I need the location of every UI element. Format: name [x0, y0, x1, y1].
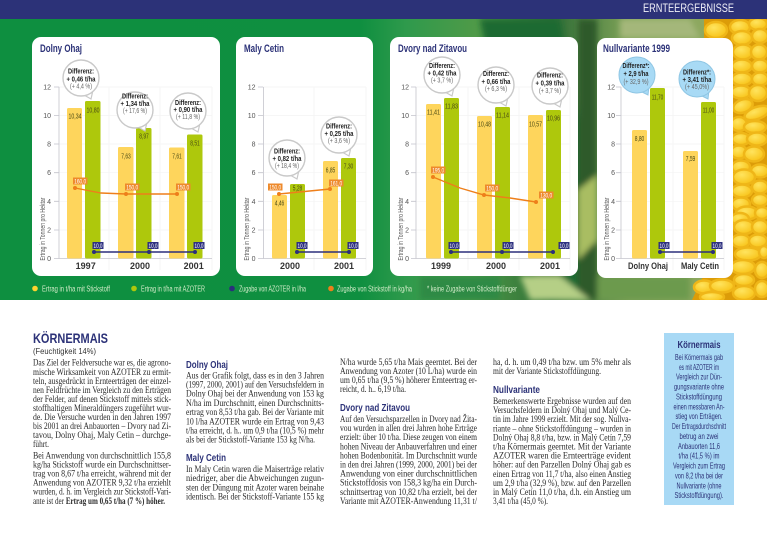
- callout: Körnermais summary: Vergleich zur Dün-: [676, 372, 722, 382]
- panel: Maly Cetin: 10: [248, 113, 256, 120]
- panel: Nullvariante 1999: 8,80: [635, 134, 644, 143]
- text column 3: in den drei Jahren (1999, 2000, 2001) bei der: [340, 460, 477, 470]
- text column 1: bis 2001 an drei Anbauorten – Dvory nad Zi-: [33, 421, 171, 431]
- text column 2: In Maly Cetin waren die Maiserträge relativ: [186, 464, 324, 474]
- panel: Dvory nad Zitavou: + 0,66 t/ha: [482, 77, 511, 86]
- panel: Nullvariante 1999: 11,70: [652, 92, 663, 102]
- panel: Dvory nad Zitavou: 2000: [486, 261, 506, 271]
- text column 3: Auf den Versuchsparzellen in Dvory nad Žita-: [340, 414, 477, 424]
- panel: Nullvariante 1999: [597, 38, 733, 278]
- text column 3: Variante mit AZOTER-Anwendung 11,31 t/: [340, 496, 477, 506]
- text column 4: um 2,9 t/ha (32,9 %), bzw. auf den Parzellen: [493, 478, 631, 488]
- legend: Zugabe von AZOTER in l/ha: [239, 284, 306, 294]
- panel: Maly Cetin: Differenz:: [274, 146, 300, 156]
- panel: Dvory nad Zitavou: Dvory nad Zitavou: [398, 43, 467, 55]
- callout: Körnermais summary: gungsvariante ohne: [674, 382, 724, 392]
- field photo background band: [0, 19, 767, 300]
- panel: Dolny Ohaj: 150,0: [177, 184, 189, 191]
- legend: * keine Zugabe von Stickstoffdünger: [427, 284, 517, 294]
- callout: Körnermais summary: Stickstoffdüngung).: [674, 490, 724, 500]
- text column 3: N/ha wurde 5,65 t/ha Mais geerntet. Bei der: [340, 357, 477, 367]
- callout: Körnermais summary: Körnermais: [678, 340, 721, 351]
- panel: Maly Cetin: 12: [248, 84, 256, 91]
- panel: Dolny Ohaj: 10,34: [68, 112, 82, 120]
- text column 2: als bei der Stickstoff-Variante 153 kg N/ha.: [186, 435, 315, 445]
- panel: Dvory nad Zitavou: (+ 3,7 %): [431, 78, 453, 84]
- panel: Dvory nad Zitavou: 11,14: [496, 110, 509, 120]
- panel: Dvory nad Zitavou: 11,41: [427, 108, 440, 116]
- panel: Dvory nad Zitavou: 1999: [431, 261, 451, 271]
- heading: Körnermais: KÖRNERMAIS: [33, 330, 108, 346]
- callout: Körnermais summary: Anbauorten 11,6: [678, 441, 720, 451]
- panel: Dolny Ohaj: 10,0: [148, 243, 158, 250]
- text column 4: höher: auf den Parzellen Dolný Ohaj gab es: [493, 460, 631, 470]
- text column 1: kg/ha Stickstoff wurde ein Durchschnittser-: [33, 459, 171, 469]
- panel: Dolny Ohaj: Differenz:: [122, 92, 148, 100]
- panel: Maly Cetin: 2000: [280, 261, 300, 271]
- panel: Dvory nad Zitavou: [390, 37, 578, 276]
- text column 2: identisch. Bei der Stickstoff-Variante 155 kg: [186, 492, 324, 502]
- panel: Dolny Ohaj: + 0,90 t/ha: [174, 105, 203, 114]
- text column 3: schnittsertrag von 10,82 t/ha erzielt, bei der: [340, 487, 477, 497]
- text column 1: ante ist der Ertrag um 0,65 t/ha (7 %) höher.: [33, 496, 165, 506]
- panel: Dolny Ohaj: (+ 4,4 %): [70, 84, 92, 90]
- text column 4: einen Ertrag von 11,7 t/ha, also einen Anstieg: [493, 469, 631, 479]
- panel: Dvory nad Zitavou: 10,48: [478, 120, 491, 128]
- text column 1: tavou, Dolny Ohaj, Maly Cetin – durchge-: [33, 430, 171, 440]
- text column 2: niedriger, aber die Abweichungen zugun-: [186, 473, 324, 483]
- text column 4: ha, d. h. um 0,49 t/ha bzw. um 5% mehr als: [493, 357, 631, 367]
- text column 2: (1997, 2000, 2001) auf den Versuchsfeldern in: [186, 380, 324, 390]
- legend: Ertrag in t/ha mit Stickstoff: [42, 284, 111, 294]
- text column 1: der Felder, auf denen Stickstoff mittels stick-: [33, 394, 171, 404]
- panel: Dolny Ohaj: 10: [43, 113, 51, 120]
- panel: Dvory nad Zitavou: Ertrag in Tonnen pro Hektar: [396, 197, 405, 260]
- panel: Dvory nad Zitavou: 10,0: [560, 243, 569, 250]
- text column 1: trag von 8,67 t/ha erreicht, während mit der: [33, 468, 171, 478]
- text column 3: erzielt: über 10 t/ha. Diese zeugen von einem: [340, 432, 477, 442]
- panel: Maly Cetin: + 0,25 t/ha: [324, 129, 354, 138]
- legend: Zugabe von Stickstoff in kg/ha: [337, 284, 412, 294]
- text column 4: Bemerkenswerte Ergebnisse wurden auf den: [493, 396, 631, 406]
- text column 2: 10 l/ha AZOTER wurde ein Ertrag von 9,43: [186, 416, 324, 426]
- panel: Maly Cetin: + 0,82 t/ha: [272, 154, 302, 163]
- panel: Dolny Ohaj: 2000: [130, 261, 150, 271]
- text column 1: wurden, d. h. im Vergleich zur Stickstoff-Vari-: [33, 487, 171, 497]
- panel: Dvory nad Zitavou: Differenz:: [537, 70, 563, 80]
- subheading: Dvory nad Zitavou: Dvory nad Zitavou: [340, 402, 410, 414]
- text column 3: hohen Niveau der Anbauverfahren und einer: [340, 441, 477, 451]
- panel: Dvory nad Zitavou: 8: [405, 141, 409, 148]
- text column 1: [33, 358, 171, 506]
- panel: Dvory nad Zitavou: + 0,39 t/ha: [536, 78, 565, 88]
- subheading: Nullvariante: Nullvariante: [493, 384, 540, 396]
- panel: Dolny Ohaj: 12: [43, 84, 51, 91]
- subheading: moisture: (Feuchtigkeit 14%): [33, 347, 96, 356]
- panel: Dvory nad Zitavou: 10: [401, 113, 409, 120]
- panel: Maly Cetin: [236, 37, 373, 276]
- panel: Nullvariante 1999: 8: [611, 141, 615, 148]
- header title: ERNTEERGEBNISSE: [643, 3, 734, 15]
- callout: Körnermais summary: t/ha (41,5 %) im: [678, 451, 720, 461]
- panel: Maly Cetin: 10,0: [298, 243, 307, 250]
- panel: Dolny Ohaj: + 1,34 t/ha: [120, 99, 150, 108]
- panel: Nullvariante 1999: + 2,9 t/ha: [624, 69, 649, 78]
- text column 1: stoffhaltigen Mineraldüngers zugeführt wur-: [33, 403, 171, 413]
- panel: Dolny Ohaj: Ertrag in Tonnen pro Hektar: [38, 197, 47, 260]
- panel: Nullvariante 1999: Maly Cetin: [681, 261, 719, 271]
- panel: Nullvariante 1999: + 3,41 t/ha: [682, 75, 712, 84]
- panel: Maly Cetin: 4: [252, 199, 256, 206]
- panel: Dolny Ohaj: 2001: [184, 261, 204, 271]
- text column 4: t/ha Körnermais geerntet. Mit der Variante: [493, 442, 631, 452]
- panel: Dolny Ohaj: Differenz:: [68, 66, 94, 76]
- callout: Körnermais summary: es mit AZOTER im: [679, 362, 719, 372]
- panel: Nullvariante 1999: 10,0: [660, 243, 669, 250]
- panel: Nullvariante 1999: (+ 45,0%): [685, 84, 709, 91]
- panel: Dvory nad Zitavou: 12: [401, 84, 409, 91]
- panel: Nullvariante 1999: 10,0: [712, 243, 722, 250]
- text column 3: vou wurden in allen drei Jahren hohe Erträge: [340, 423, 477, 433]
- panel: Dvory nad Zitavou: 195,0: [432, 167, 444, 174]
- panel: Dvory nad Zitavou: 10,0: [450, 243, 459, 250]
- panel: Maly Cetin: 8: [252, 141, 256, 148]
- panel: Dvory nad Zitavou: (+ 3,7 %): [539, 88, 561, 95]
- callout: Körnermais summary: Der Ertragsdurchschnitt: [672, 421, 726, 431]
- panel: Dolny Ohaj: Dolny Ohaj: [40, 43, 82, 55]
- panel: Dvory nad Zitavou: 11,83: [445, 102, 458, 110]
- panel: Maly Cetin: 150,0: [269, 184, 281, 191]
- panel: Maly Cetin: 7,30: [344, 162, 353, 170]
- panel: Maly Cetin: 2: [252, 227, 256, 234]
- panel: Dvory nad Zitavou: 2001: [540, 261, 560, 271]
- panel: Maly Cetin: 4,46: [275, 198, 284, 208]
- callout: Körnermais summary: Nullvariante (ohne: [676, 480, 722, 490]
- text column 2: ertrag von 8,53 t/ha gab. Bei der Variante mit: [186, 407, 324, 417]
- panel: Nullvariante 1999: 2: [611, 227, 615, 234]
- callout: Körnermais summary: betrug an zwei: [680, 431, 719, 441]
- legend: Ertrag in t/ha mit AZOTER: [141, 284, 205, 294]
- panel: Dolny Ohaj: + 0,46 t/ha: [66, 74, 96, 84]
- panel: Nullvariante 1999: Nullvariante 1999: [603, 43, 670, 55]
- header bar: [0, 0, 767, 19]
- callout: Körnermais summary: Vergleich zum Ertrag: [673, 461, 725, 471]
- text column 4: AZOTER waren die Ernteerträge evident: [493, 451, 631, 461]
- text column 4: 3,41 t/ha (45,0 %).: [493, 496, 548, 506]
- panel: Dvory nad Zitavou: 10,0: [504, 243, 513, 250]
- callout: Körnermais summary: Bei Körnermais gab: [675, 352, 723, 362]
- panel: Nullvariante 1999: 7,59: [686, 154, 695, 163]
- text column 4: Versuchsfeldern in Dolný Ohaj und Malý Ce-: [493, 405, 631, 415]
- panel: Nullvariante 1999: (+ 32,9 %): [624, 79, 648, 86]
- panel: Dvory nad Zitavou: 150,0: [486, 185, 498, 192]
- callout: Körnermais summary: stieg von Erträgen.: [676, 411, 722, 421]
- callout: Körnermais summary: Stickstoffdüngung: [676, 392, 722, 402]
- panel: Dolny Ohaj: 4: [47, 199, 51, 206]
- panel: Dvory nad Zitavou: (+ 6,3 %): [485, 86, 507, 93]
- panel: Dvory nad Zitavou: + 0,42 t/ha: [428, 68, 457, 78]
- legend: [32, 284, 517, 294]
- panel: Maly Cetin: Maly Cetin: [244, 43, 284, 55]
- text column 3: hohen Bodenbonität. Im Durchschnitt wurde: [340, 450, 477, 460]
- panel: Maly Cetin: (+ 3,6 %): [328, 138, 350, 145]
- panel: Maly Cetin: 6,85: [326, 166, 335, 174]
- panel: Maly Cetin: (+ 18,4 %): [275, 163, 299, 170]
- panel: Maly Cetin: Ertrag in Tonnen pro Hektar: [242, 197, 251, 260]
- callout: Körnermais summary: [664, 333, 734, 505]
- panel: Nullvariante 1999: 10: [607, 113, 615, 120]
- panel: Dolny Ohaj: (+ 11,8 %): [176, 114, 200, 121]
- text column 3: Stickstoffdosis von 158,3 kg/ha ein Durch-: [340, 478, 477, 488]
- text column 4: riante – ohne Stickstoffdüngung – wurden in: [493, 423, 631, 433]
- panel: Dolny Ohaj: 10,0: [194, 243, 204, 250]
- panel: Dolny Ohaj: 8,51: [190, 138, 200, 148]
- panel: Dvory nad Zitavou: 2: [405, 227, 409, 234]
- text column 3: um 0,65 t/ha (9,5 %) höherer Ernteertrag er-: [340, 375, 477, 385]
- text column 1: Bei Anwendung von durchschnittlich 155,8: [33, 450, 171, 460]
- panel: Nullvariante 1999: 6: [611, 170, 615, 177]
- text column 1: Anwendung von AZOTER 9,32 t/ha erziehlt: [33, 478, 171, 488]
- text column 3: Anwendung von einer durchschnittlichen: [340, 469, 477, 479]
- panel: Dvory nad Zitavou: 0: [405, 256, 409, 263]
- panel: Dolny Ohaj: 0: [47, 256, 51, 263]
- panel: Dolny Ohaj: 2: [47, 227, 51, 234]
- panel: Maly Cetin: Differenz:: [326, 122, 352, 130]
- corn cob photo: [692, 18, 767, 302]
- text column 2: Aus der Grafik folgt, dass es in den 3 Jahren: [186, 370, 324, 380]
- panel: Nullvariante 1999: 0: [611, 256, 615, 263]
- panel: Dvory nad Zitavou: 10,57: [529, 120, 542, 128]
- text column 1: Das Ziel der Feldversuche war es, die agrono-: [33, 358, 171, 368]
- panel: Dvory nad Zitavou: 10,96: [547, 114, 560, 122]
- text column 3: [340, 357, 477, 506]
- subheading: Dolny Ohaj: Dolny Ohaj: [186, 359, 228, 371]
- text column 2: t/ha erreicht, d. h.. um 0,9 t/ha (10,5 %) mehr: [186, 426, 324, 436]
- callout: Körnermais summary: einen messbaren An-: [674, 401, 725, 411]
- text column 1: mische Wirksamkeit von AZOTER zu ermit-: [33, 367, 171, 377]
- panel: Dvory nad Zitavou: 4: [405, 199, 409, 206]
- text column 2: Dolny Ohaj bei der Anwendung von 153 kg: [186, 389, 324, 399]
- panel: Nullvariante 1999: Dolny Ohaj: [628, 261, 668, 271]
- panel: Nullvariante 1999: 11,00: [703, 106, 714, 114]
- text column 4: in Malý Cetín 11,0 t/ha, d.h. ein Anstieg um: [493, 487, 631, 497]
- text column 4: Dolný Ohaj 8,8 t/ha, bzw. in Malý Cetín 7,59: [493, 432, 631, 442]
- panel: Dolny Ohaj: 1997: [76, 261, 96, 271]
- panel: Dolny Ohaj: 150,0: [126, 184, 138, 191]
- text column 2: [186, 359, 324, 502]
- panel: Dvory nad Zitavou: Differenz:: [429, 61, 455, 70]
- panel: Dolny Ohaj: 6: [47, 170, 51, 177]
- panel: Dvory nad Zitavou: 6: [405, 170, 409, 177]
- callout: Körnermais summary: von 8,2 t/ha bei der: [675, 470, 723, 480]
- panel: Dolny Ohaj: 8: [47, 141, 51, 148]
- panel: Dolny Ohaj: 7,63: [121, 152, 131, 160]
- panel: Dvory nad Zitavou: 130,0: [540, 192, 552, 199]
- panel: Dolny Ohaj: 7,61: [172, 152, 182, 160]
- panel: Dolny Ohaj: 8,97: [139, 132, 149, 140]
- text column 1: de. Die Versuche wurden in den Jahren 1997: [33, 412, 171, 422]
- panel: Dolny Ohaj: Differenz:: [175, 98, 201, 107]
- text column 2: N/ha im Durchschnitt, einen Durchschnitts-: [186, 398, 324, 408]
- panel: Nullvariante 1999: Differenz*:: [622, 61, 650, 70]
- panel: Maly Cetin: 2001: [334, 261, 354, 271]
- panel: Dolny Ohaj: 10,0: [94, 243, 103, 250]
- text column 4: mit der Variante Stickstoffdüngung.: [493, 366, 601, 376]
- panel: Dolny Ohaj: [32, 37, 220, 276]
- text column 1: führt.: [33, 439, 49, 449]
- text column 1: nen Feldfrüchte im Vergleich zu den Erträgen: [33, 385, 171, 395]
- panel: Maly Cetin: 10,0: [348, 243, 358, 250]
- text column 4: [493, 357, 631, 506]
- panel: Nullvariante 1999: 4: [611, 199, 615, 206]
- panel: Maly Cetin: 161,0: [330, 180, 342, 187]
- panel: Nullvariante 1999: Ertrag in Tonnen pro Hektar: [602, 197, 611, 260]
- panel: Maly Cetin: 0: [252, 256, 256, 263]
- text column 3: Anwendung von Azoter (10 L/ha) wurde ein: [340, 366, 477, 376]
- panel: Nullvariante 1999: 12: [607, 84, 615, 91]
- panel: Dolny Ohaj: 160,0: [74, 178, 86, 185]
- text column 4: tin im Jahre 1999 erzielt. Mit der sog. Nullva-: [493, 414, 631, 424]
- text column 2: sten der Düngung mit Azoter waren beinahe: [186, 482, 324, 492]
- panel: Nullvariante 1999: Differenz*:: [683, 68, 711, 76]
- panel: Maly Cetin: 5,28: [293, 184, 302, 192]
- panel: Dolny Ohaj: 10,80: [86, 106, 100, 114]
- panel: Dvory nad Zitavou: Differenz:: [483, 69, 509, 78]
- text column 1: teln, ausgedrückt in Ernteerträgen der einzel-: [33, 376, 171, 386]
- text column 3: reicht, d. h.. 6,19 t/ha.: [340, 384, 406, 394]
- panel: Dolny Ohaj: (+ 17,6 %): [123, 108, 147, 115]
- panel: Maly Cetin: 6: [252, 170, 256, 177]
- subheading: Maly Cetin: Maly Cetin: [186, 452, 226, 464]
